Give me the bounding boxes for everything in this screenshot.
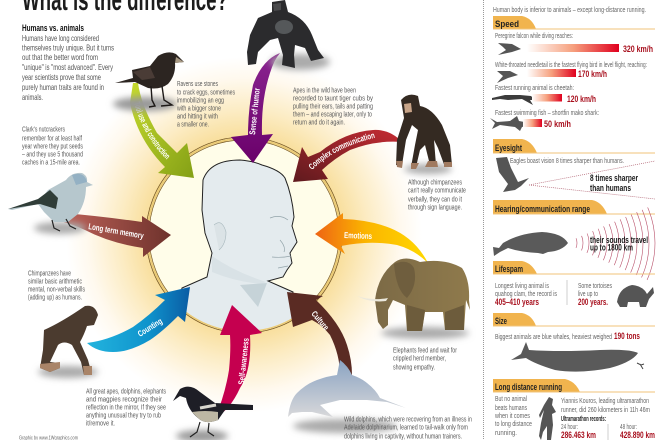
icon: shark — [490, 116, 535, 131]
icon: human scale — [637, 363, 644, 369]
arrow: complex communication — [293, 130, 398, 182]
animal: raven — [113, 52, 184, 111]
heading: speed — [493, 16, 655, 30]
heading: eyesight — [493, 139, 655, 154]
text: mirror: it/remove it. — [86, 418, 115, 428]
text: nutcracker: caches in a 15-mile area. — [22, 158, 80, 166]
text: chimpanzee communication: through sign language. — [408, 202, 462, 212]
heading: size: Size — [495, 316, 507, 327]
human head — [181, 160, 298, 330]
panel: hearing — [493, 200, 656, 280]
intro text block: purely human traits are found in — [22, 82, 104, 92]
intro text block — [22, 23, 114, 102]
panel: speed: 120 km/h — [567, 94, 596, 104]
heading: lifespan — [493, 261, 655, 275]
text: chimpanzee communication: verbally, they can do it — [408, 194, 463, 204]
animal: magpie — [173, 387, 253, 440]
bar: needletail speed — [527, 69, 576, 77]
text: chimpanzee communication: Although chimpanzees — [408, 178, 462, 186]
panel: lifespan: 200 years. — [578, 297, 608, 307]
intro text block: Humans have long considered — [22, 33, 99, 43]
heading: running: Long distance running — [495, 382, 562, 393]
arrow: tool use and construction — [130, 83, 194, 178]
arrow: culture — [287, 292, 352, 375]
panel: size: 190 tons — [614, 331, 640, 341]
animal: chimpanzee walking — [38, 306, 98, 378]
intro text block: themselves truly unique. But it turns — [22, 42, 114, 52]
panel: lifespan: quahog clam, the record is — [495, 291, 557, 298]
heading: hearing — [493, 200, 655, 215]
intro text block: animals. — [22, 92, 43, 102]
icon: blue whale — [511, 342, 638, 372]
text: nutcracker: year where they put seeds — [22, 142, 83, 150]
arrow label: Culture — [309, 309, 331, 332]
text: elephant: showing empathy. — [393, 362, 435, 372]
icon: cheetah — [492, 95, 535, 105]
text: nutcracker: remember for at least half — [22, 134, 83, 142]
panel: long distance running: 48 hour: — [620, 424, 637, 431]
heading: hearing: Hearing/communication range — [495, 204, 590, 215]
panel: eyesight: than humans — [590, 183, 631, 193]
text: mirror: reflection in the mirror, If they see — [86, 402, 166, 412]
heading: speed: Speed — [495, 19, 519, 30]
text: raven: to crack eggs, sometimes — [177, 88, 235, 96]
intro text block: out that the better word from — [22, 52, 98, 62]
text: raven — [176, 79, 235, 128]
panel: speed: Fastest running animal is cheetah: — [495, 85, 574, 92]
text: mirror: and magpies recognize their — [86, 394, 162, 404]
text: elephant: crippled herd member, — [393, 354, 446, 362]
text: chimpanzee arithmetic — [28, 268, 85, 302]
ring and inner circle — [146, 137, 342, 333]
panel: size — [493, 313, 655, 372]
panel: long distance running: running. — [495, 430, 517, 437]
panel: long distance running: 286.463 km — [561, 430, 596, 440]
text: nutcracker: Clark's nutcrackers — [22, 124, 65, 134]
panel: eyesight — [493, 139, 655, 199]
heading: running — [493, 379, 655, 393]
bar: shark speed — [523, 119, 542, 127]
arrow: self-awareness — [215, 305, 262, 418]
text: apes: recorded to taunt tiger cubs by — [293, 94, 373, 102]
arrow: sense of humor — [231, 53, 280, 163]
icon: tortoise — [617, 285, 654, 307]
background glow — [40, 45, 460, 440]
panel: speed: 170 km/h — [578, 69, 607, 79]
icon: runner — [539, 397, 556, 440]
sidebar divider — [482, 0, 484, 440]
bar: cheetah speed — [532, 94, 562, 102]
arrow: long term memory — [60, 213, 171, 257]
text: raven: a smaller one. — [177, 120, 209, 128]
arrow: counting — [87, 287, 190, 352]
panel: lifespan: 405–410 years — [495, 297, 539, 307]
text: nutcracker: – and they use 5 thousand — [22, 150, 83, 158]
panel: size: Biggest animals are blue whales, heaviest weighed — [495, 334, 612, 341]
icon: whale — [493, 232, 568, 256]
intro heading: Humans vs. animals — [22, 23, 84, 34]
text: mirror — [86, 386, 166, 428]
panel: lifespan — [493, 261, 655, 307]
text: raven: with a bigger stone — [176, 104, 221, 112]
text: dolphin: Wild dolphins, which were recovering from an illness in — [344, 414, 472, 424]
panel: long distance running: beats humans — [495, 405, 527, 412]
intro text block: year scientists prove that some — [22, 72, 101, 82]
arrow label: Counting — [136, 316, 164, 339]
intro text block: "unique" is "most advanced". Every — [22, 62, 114, 72]
arrow label: Self-awareness — [236, 337, 251, 385]
text: raven: Ravens use stones — [177, 79, 218, 88]
text: chimpanzee arithmetic: (adding up) as humans. — [28, 292, 82, 302]
text: elephant — [393, 346, 457, 372]
arrow label: Complex communication — [309, 134, 375, 169]
text: elephant: Elephants feed and wait for — [393, 346, 457, 354]
animal: elephant — [357, 258, 470, 339]
panel: long distance running: when it comes — [494, 413, 530, 420]
panel: long distance running: Ultramarathon records: — [561, 414, 606, 423]
panel: speed — [490, 16, 655, 131]
text: nutcracker — [22, 124, 83, 166]
text: chimpanzee communication: can't really communicate — [408, 186, 466, 194]
text: mirror: anything unusual they try to rub — [86, 410, 161, 420]
panel: speed: 50 km/h — [544, 119, 571, 129]
text: apes: Apes in the wild have been — [293, 86, 356, 94]
text: raven: immobilizing an egg — [177, 96, 224, 104]
heading: size — [493, 313, 655, 327]
icon: needletail — [497, 71, 518, 83]
icon: falcon — [498, 43, 521, 55]
panel: long distance running: to long distance — [495, 421, 532, 428]
text: apes: pulling their ears, tails and patting — [293, 102, 373, 110]
panel: lifespan: Longest living animal is — [495, 283, 549, 290]
text: dolphin: Adelaide dolphinarium, learned to tail-walk only from — [344, 422, 468, 432]
icon: eagle — [496, 157, 529, 192]
arrow label: Tool use and construction — [135, 102, 170, 160]
panel: long distance running: But no animal — [495, 396, 527, 403]
text: chimpanzee communication — [408, 178, 466, 212]
panel: eyesight: 8 times sharper — [590, 173, 638, 183]
text: apes — [293, 86, 373, 126]
panel: lifespan: live up to — [578, 291, 598, 298]
text: chimpanzee arithmetic: mental, non-verbal skills — [28, 284, 85, 294]
text: apes: return and do it again. — [293, 118, 345, 126]
panel: long distance running: 24 hour: — [561, 424, 578, 431]
panel: lifespan: Some tortoises — [578, 283, 612, 290]
panel: speed: Fastest swimming fish – shortfin mako shark: — [495, 110, 599, 117]
arrow label: Long term memory — [88, 221, 145, 241]
bar: falcon speed — [527, 44, 619, 52]
animal: nutcracker — [8, 173, 93, 234]
text: mirror: All great apes, dolphins, elephants — [86, 386, 166, 396]
arrow label: Sense of humor — [247, 87, 262, 135]
animal: dolphin — [288, 360, 406, 433]
text: apes: them – and escaping later, only to — [293, 110, 372, 118]
animal: gorilla — [247, 0, 330, 70]
arrow: emotions — [315, 213, 428, 263]
text: chimpanzee arithmetic: Chimpanzees have — [28, 268, 71, 278]
sound waves — [576, 207, 656, 280]
panel: speed: Peregrine falcon while diving reaches: — [495, 33, 573, 40]
panel: long distance running — [493, 379, 655, 440]
vision cone — [529, 161, 655, 199]
heading: eyesight: Eyesight — [495, 143, 523, 154]
arrow label: Emotions — [344, 230, 372, 241]
text: dolphin — [344, 414, 472, 440]
animal: chimpanzee standing — [396, 95, 452, 174]
text: raven: and hitting it with — [177, 112, 218, 120]
panel: hearing: up to 1800 km — [590, 242, 633, 252]
heading: lifespan: Lifespam — [495, 264, 523, 275]
text: chimpanzee arithmetic: similar basic arithmetic — [28, 276, 82, 286]
